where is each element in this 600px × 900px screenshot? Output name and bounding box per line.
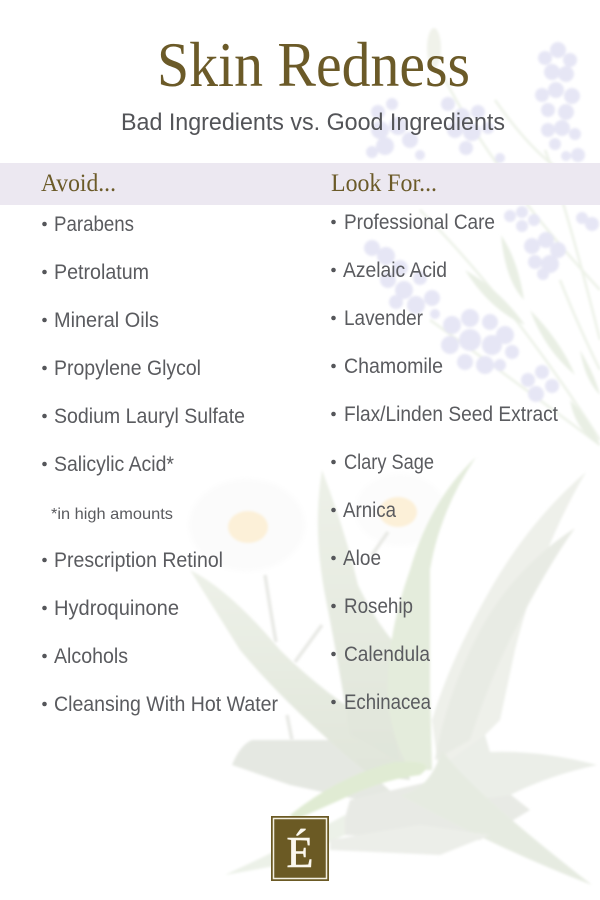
background: chamomile flowers (189, 474, 445, 740)
list: avoid: Prescription Retinol (54, 549, 223, 572)
list: look for: Chamomile (344, 355, 443, 378)
list: look for: Arnica (343, 499, 396, 522)
background: aloe plant (190, 457, 597, 885)
heading: avoid: Avoid... (41, 170, 116, 197)
list: avoid: Hydroquinone (54, 597, 179, 620)
list: look for: Lavender (344, 307, 423, 330)
list: avoid (42, 213, 278, 716)
background: lavender sprigs (364, 28, 600, 445)
logo: É (287, 828, 313, 877)
list: look for: Calendula (344, 643, 430, 666)
list: look for: Flax/Linden Seed Extract (344, 403, 558, 426)
title: Skin Redness (157, 29, 470, 100)
list: look for: Rosehip (344, 595, 413, 618)
list: avoid: Sodium Lauryl Sulfate (54, 405, 245, 428)
logo (271, 816, 329, 881)
subtitle: Bad Ingredients vs. Good Ingredients (121, 109, 505, 136)
list: look for (331, 211, 558, 714)
list: avoid: Propylene Glycol (54, 357, 201, 380)
list: avoid: Mineral Oils (54, 309, 159, 332)
list: avoid: Alcohols (54, 645, 128, 668)
list: look for: Aloe (343, 547, 381, 570)
heading: look for: Look For... (331, 170, 437, 197)
list: look for: Professional Care (344, 211, 495, 234)
list: avoid: Petrolatum (54, 261, 149, 284)
list: avoid: Salicylic Acid* (54, 453, 174, 476)
list: avoid: Parabens (54, 213, 134, 236)
list: look for: Clary Sage (344, 451, 434, 474)
lavender header band (0, 163, 600, 205)
list: avoid: Cleansing With Hot Water (54, 693, 278, 716)
list: avoid: *in high amounts (51, 506, 173, 523)
list: look for: Echinacea (344, 691, 431, 714)
list: look for: Azelaic Acid (343, 259, 447, 282)
